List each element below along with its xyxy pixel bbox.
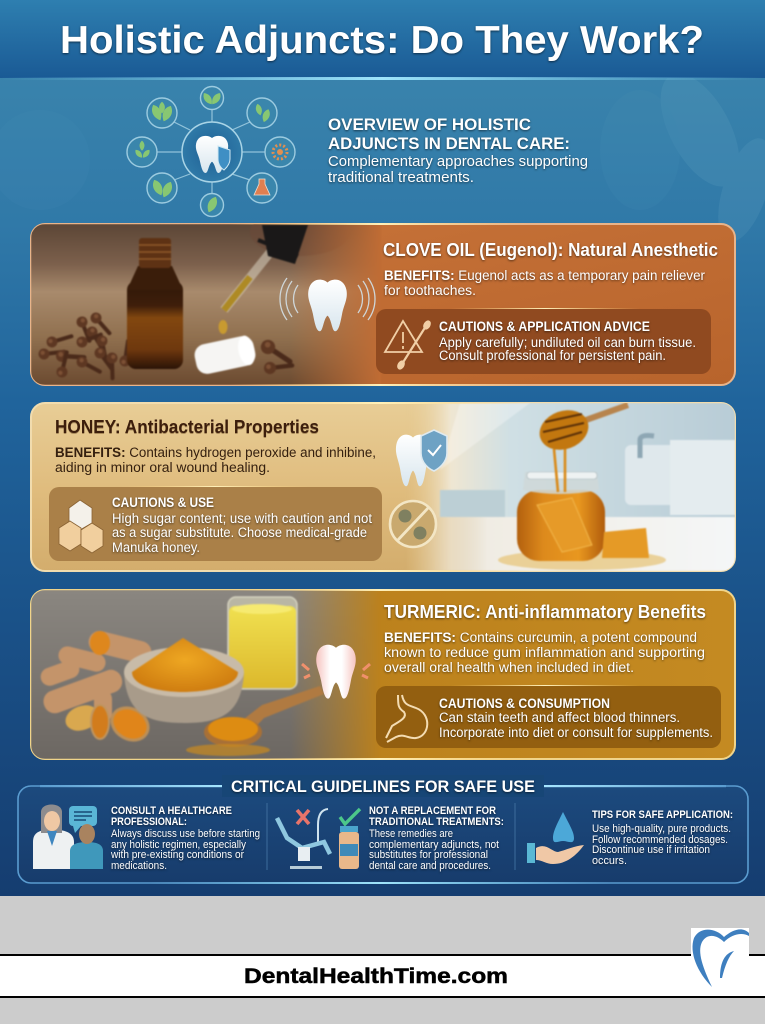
header band [0,0,765,80]
overview text: Complementary approaches supporting [328,154,588,170]
turmeric benefits: known to reduce gum inflammation and supporting [384,645,705,660]
panel: critical guidelines [18,775,748,884]
tips text: occurs. [592,855,627,867]
replacement text [369,805,504,872]
caution text: Manuka honey. [112,540,200,555]
caution text: Can stain teeth and affect blood thinners. [439,710,680,725]
caution text: CAUTIONS & USE [112,495,214,510]
icon: water drop over hand [527,812,584,864]
photo: clove oil bottle, dropper and cloves [31,224,376,385]
consult text: CONSULT A HEALTHCARE [111,805,232,817]
callout: clove cautions [376,309,711,374]
consult text: with pre-existing conditions or [110,849,244,861]
panel: honey [31,402,735,572]
turmeric heading: TURMERIC: Anti-inflammatory Benefits [384,602,706,622]
overview text: traditional treatments. [328,170,474,186]
icon: tooth and shield [396,430,447,486]
turmeric benefits [384,630,705,675]
icon: doctor and patient [33,804,103,869]
caution text: Consult professional for persistent pain. [439,348,666,363]
icon: stomach [386,695,427,742]
consult text [110,805,260,872]
honey benefits [55,445,376,475]
tips text: Follow recommended dosages. [592,834,728,846]
icon: sugar cubes [59,500,103,553]
clove oil heading: CLOVE OIL (Eugenol): Natural Anesthetic [383,240,718,260]
icon: no bacteria [390,501,436,547]
photo: turmeric roots, powder and drink [31,590,381,759]
tips text: Discontinue use if irritation [592,844,710,856]
overview text: ADJUNCTS IN DENTAL CARE: [328,135,570,153]
panel: turmeric [31,589,735,760]
consult text: PROFESSIONAL: [111,816,187,828]
consult text: Always discuss use before starting [111,828,260,840]
caution text: CAUTIONS & APPLICATION ADVICE [439,319,650,334]
photo: honey jar with dipper [405,403,735,571]
icon: inflamed tooth [302,645,370,699]
footer band [0,896,765,1024]
website name: DentalHealthTime.com [244,965,508,988]
icon: warning and swab [385,320,431,370]
caution text: High sugar content; use with caution and not [112,511,372,526]
caution text: CAUTIONS & CONSUMPTION [439,696,610,711]
title: Holistic Adjuncts: Do They Work? [60,19,704,62]
clove oil benefits: for toothaches. [384,283,476,298]
turmeric benefits: BENEFITS: Contains curcumin, a potent compound [384,630,697,645]
heading: CRITICAL GUIDELINES FOR SAFE USE [231,777,535,796]
caution text: as a sugar substitute. Choose medical-grade [112,525,367,540]
honey benefits: BENEFITS: Contains hydrogen peroxide and inhibine, [55,445,376,460]
caution text [439,319,696,363]
overview text: OVERVIEW OF HOLISTIC [328,116,531,134]
replacement text: NOT A REPLACEMENT FOR [369,805,496,817]
panel: clove oil [31,208,735,386]
icon: tooth with pain waves [280,278,375,331]
clove oil benefits [384,268,705,298]
icon hub: tooth with holistic icons [127,86,295,216]
caution text [112,495,372,555]
caution text: Apply carefully; undiluted oil can burn tissue. [439,335,696,350]
honey benefits: aiding in minor oral wound healing. [55,460,270,475]
caution text: Incorporate into diet or consult for supplements. [439,725,713,740]
replacement text: TRADITIONAL TREATMENTS: [369,816,504,828]
caution text [439,696,713,740]
replacement text: substitutes for professional [369,849,488,861]
decorative leaves [0,61,765,248]
callout: turmeric cautions [376,686,721,748]
honey heading: HONEY: Antibacterial Properties [55,417,319,437]
tips text: TIPS FOR SAFE APPLICATION: [592,809,733,821]
turmeric benefits: overall oral health when included in diet. [384,660,634,675]
consult text: any holistic regimen, especially [111,839,246,851]
logo: tooth outline [691,928,749,987]
replacement text: These remedies are [369,828,453,840]
replacement text: complementary adjuncts, not [369,839,499,851]
clove oil benefits: BENEFITS: Eugenol acts as a temporary pain reliever [384,268,705,283]
overview section [127,86,588,216]
replacement text: dental care and procedures. [369,860,491,872]
tips text [592,809,733,867]
callout: honey cautions [49,487,382,561]
consult text: medications. [111,860,167,872]
overview text [328,116,588,186]
icon: dental chair, cross, check and bottle [277,809,360,869]
tips text: Use high-quality, pure products. [592,823,731,835]
